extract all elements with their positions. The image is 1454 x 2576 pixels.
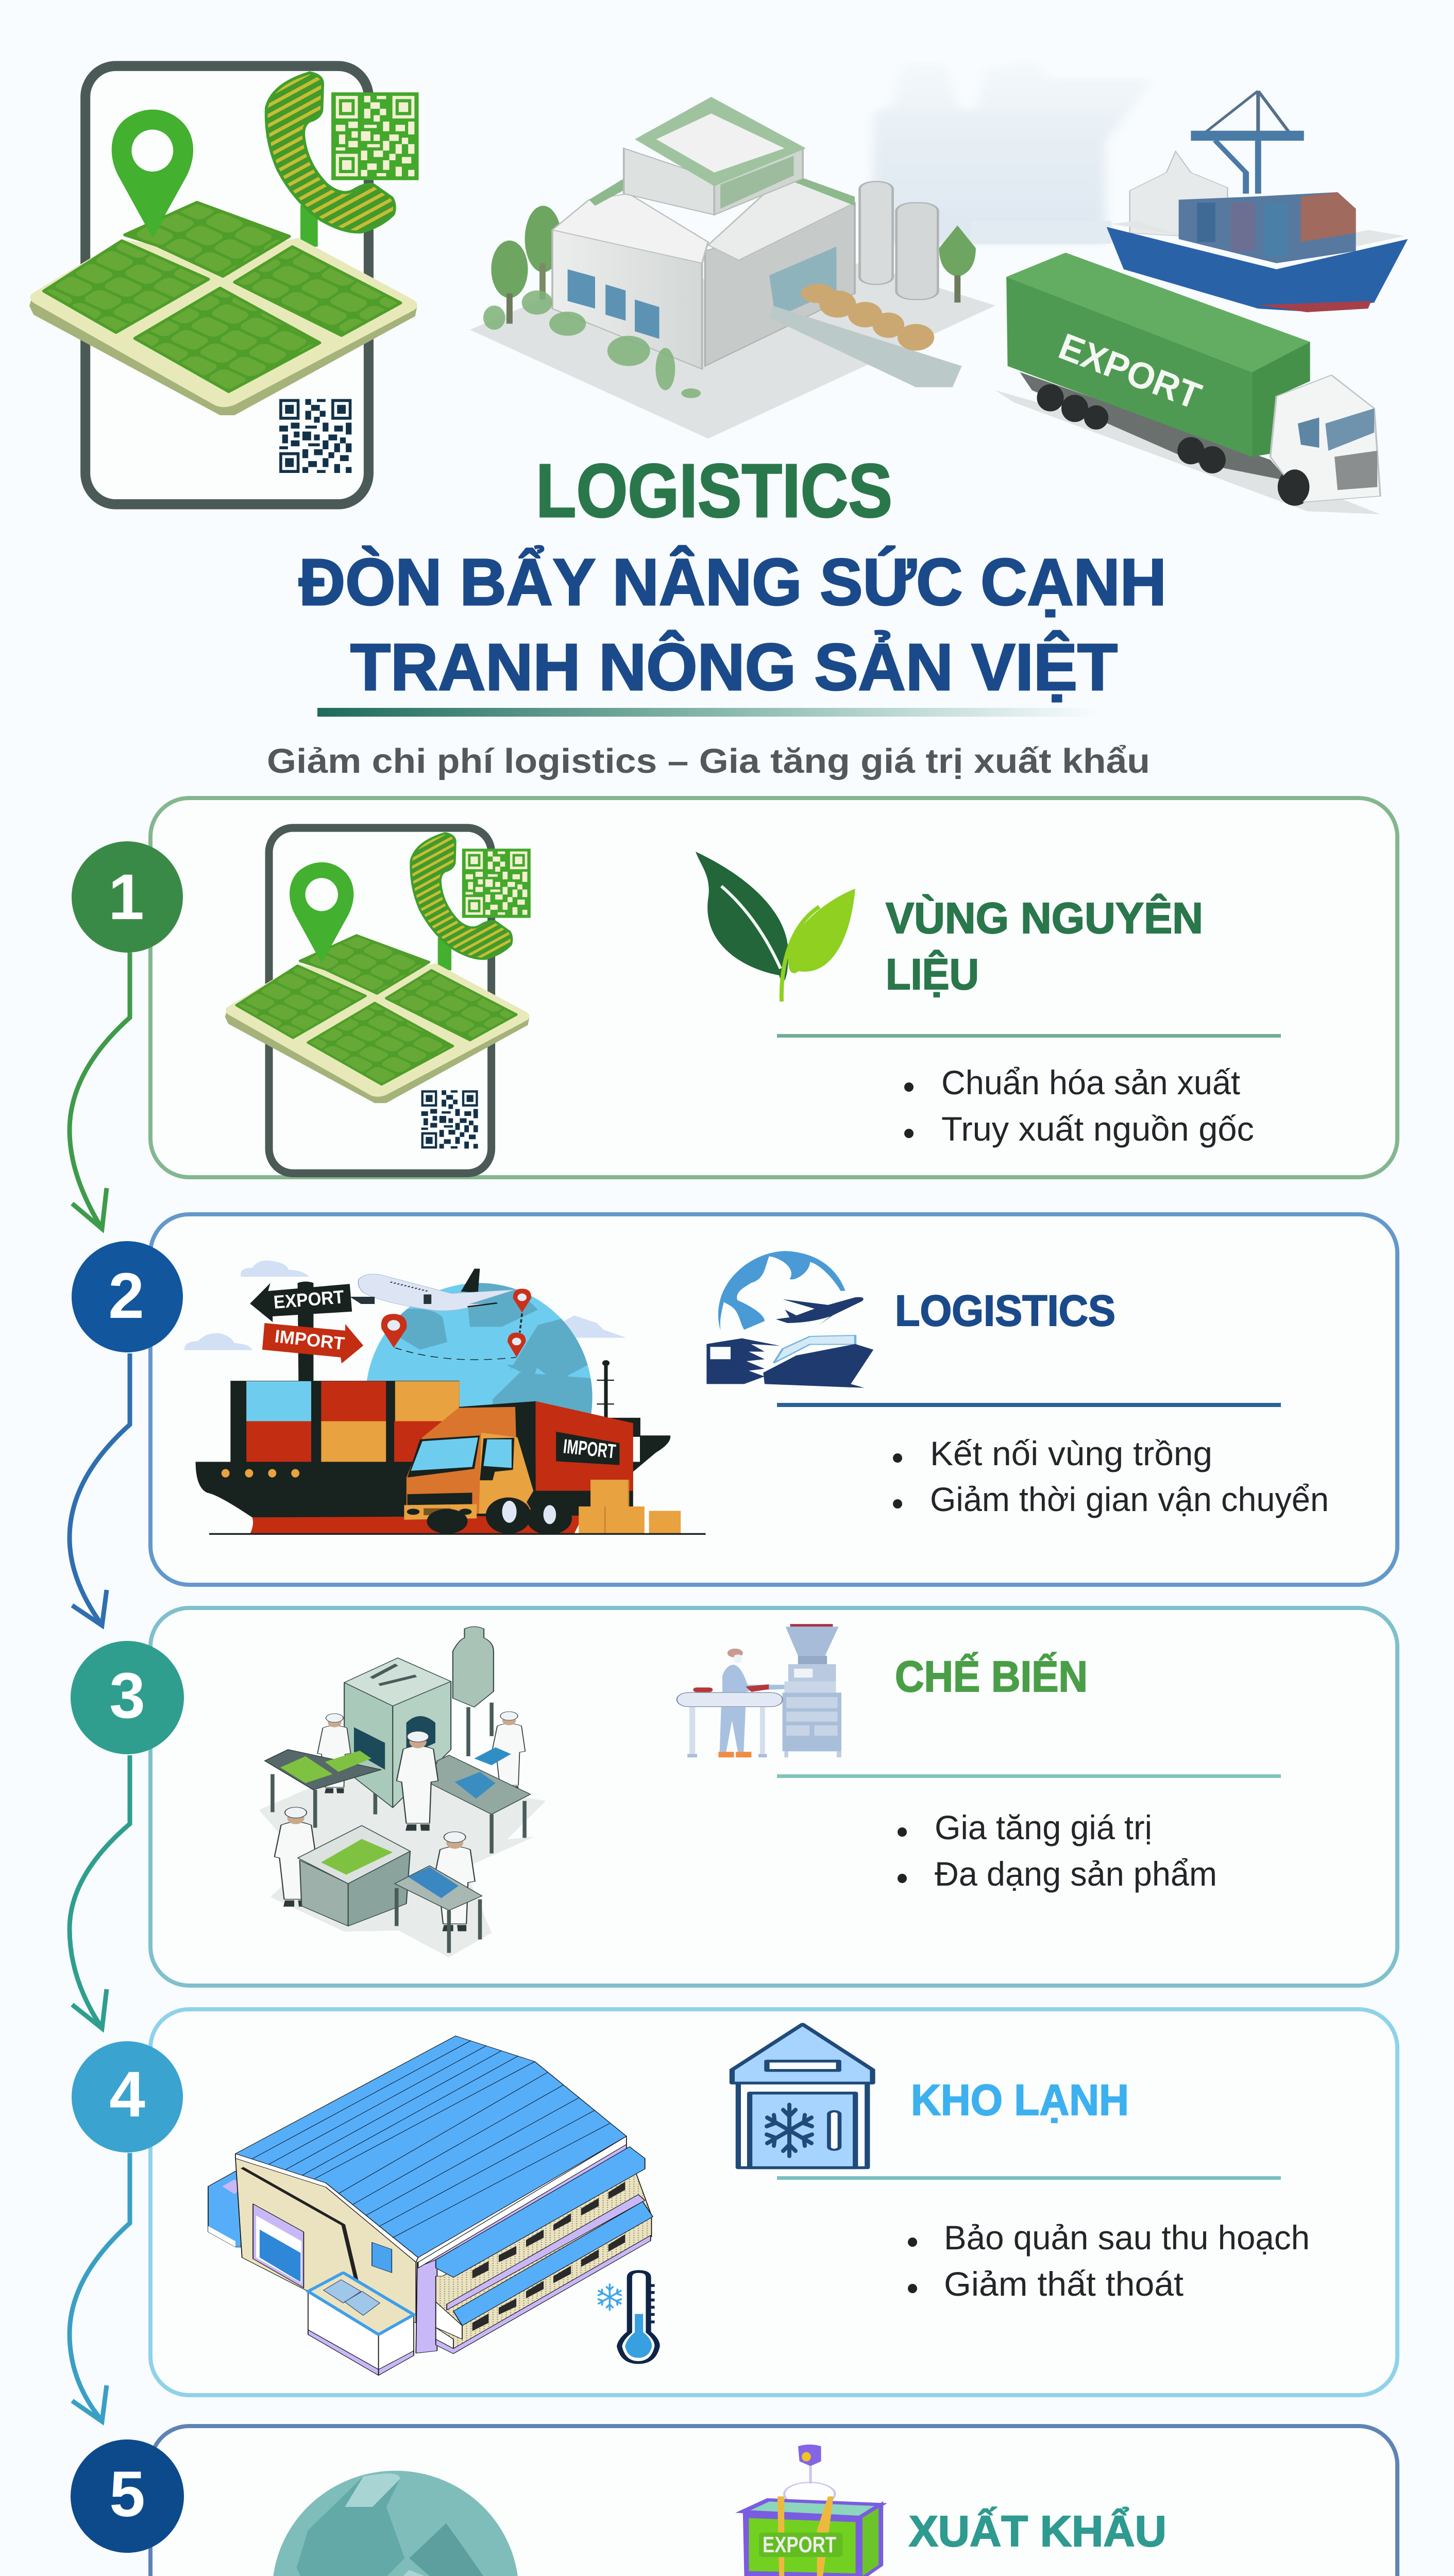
bullet list: Giảm thất thoát	[944, 2265, 1184, 2303]
step number 3: 3	[109, 1660, 145, 1732]
title line 2: ĐÒN BẨY NÂNG SỨC CẠNH	[299, 545, 1166, 619]
panel: step 5 export	[150, 2426, 1397, 2576]
icon: hanging EXPORT container	[743, 2445, 881, 2576]
icon: worker at food machine	[677, 1624, 841, 1757]
truck label: EXPORT: EXPORT	[1053, 326, 1207, 417]
sign and truck labels	[273, 1286, 617, 1463]
bullet list: Bảo quản sau thu hoạch	[944, 2218, 1310, 2257]
heading: KHO LẠNH	[911, 2076, 1129, 2124]
hero illustration: export container truck	[995, 252, 1380, 514]
hero illustration: smartphone with farm field and QR codes	[29, 66, 418, 504]
heading: XUẤT KHẨU	[909, 2507, 1166, 2555]
bullet list: Truy xuất nguồn gốc	[941, 1110, 1254, 1148]
sign and truck labels: EXPORT	[273, 1286, 345, 1313]
panel: step 3 processing	[150, 1608, 1397, 1986]
heading: VÙNG NGUYÊN	[886, 894, 1203, 942]
illustration: cold storage warehouse	[208, 2036, 657, 2376]
step number 2: 2	[108, 1260, 144, 1332]
step number 2	[72, 1241, 183, 1352]
bullet list	[898, 1808, 1217, 1893]
container label: EXPORT	[763, 2532, 836, 2557]
arrow: step 1 to 2	[70, 953, 130, 1229]
icon: two leaves	[696, 852, 855, 1002]
hero illustration: container ship and crane	[1107, 91, 1408, 312]
title	[299, 449, 1166, 704]
illustration: smartphone and field	[225, 828, 531, 1173]
bullet list: Chuẩn hóa sản xuất	[941, 1063, 1240, 1101]
step number 3	[71, 1641, 184, 1754]
bullet list	[904, 1063, 1254, 1148]
heading: CHẾ BIẾN	[895, 1652, 1088, 1701]
subtitle: Giảm chi phí logistics – Gia tăng giá trị xuất khẩu	[267, 742, 1150, 781]
illustration: workers in processing plant	[259, 1626, 546, 1957]
panel: step 1 raw material area: LIỆU	[886, 950, 979, 998]
bullet list: Đa dạng sản phẩm	[935, 1855, 1217, 1893]
sign and truck labels: IMPORT	[562, 1435, 617, 1463]
title line 3: TRANH NÔNG SẢN VIỆT	[350, 630, 1118, 704]
arrow: step 4 to 5	[70, 2153, 130, 2421]
bullet list: Giảm thời gian vận chuyển	[930, 1480, 1329, 1518]
icon: globe, plane, truck, ship	[706, 1251, 873, 1388]
hero illustration: processing factory	[470, 97, 995, 438]
panel: step 4 cold storage	[150, 2009, 1397, 2395]
panel: step 1 raw material area	[150, 798, 1397, 1177]
step number 4: 4	[109, 2059, 145, 2130]
bullet list	[893, 1434, 1329, 1518]
bullet list: Kết nối vùng trồng	[930, 1434, 1212, 1472]
illustration: ship, truck, globe, signpost	[184, 1260, 706, 1535]
illustration: globe, ship and containers	[184, 2471, 644, 2576]
step number 4	[72, 2041, 183, 2153]
arrow: step 2 to 3	[70, 1353, 130, 1625]
hero illustration: faint city skyline	[873, 58, 1154, 244]
title line 1: LOGISTICS	[536, 449, 892, 533]
step number 1	[72, 841, 183, 953]
sign and truck labels: IMPORT	[274, 1326, 346, 1354]
arrow: step 3 to 4	[70, 1755, 130, 2028]
bullet list	[908, 2218, 1310, 2303]
heading: LOGISTICS	[895, 1286, 1115, 1335]
bullet list: Gia tăng giá trị	[935, 1808, 1152, 1846]
step number 5: 5	[109, 2459, 145, 2530]
icon: cold storage house	[732, 2024, 873, 2168]
step number 5	[71, 2439, 184, 2553]
step number 1: 1	[108, 861, 144, 933]
title underline	[317, 708, 1099, 717]
panel: step 2 logistics	[150, 1214, 1397, 1585]
